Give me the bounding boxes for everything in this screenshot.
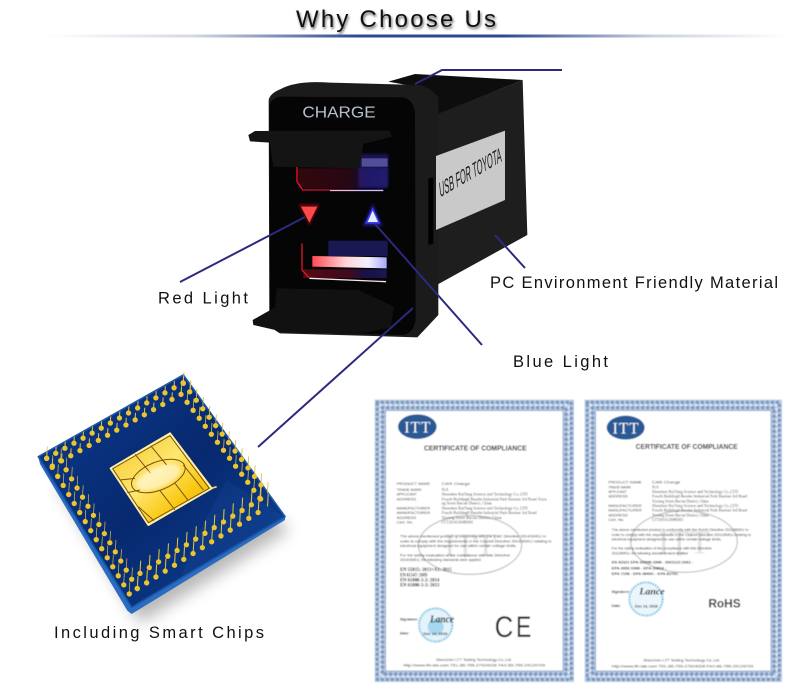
applied standards xyxy=(400,568,452,588)
title underline xyxy=(45,34,785,38)
certificate statement xyxy=(400,534,552,562)
certificate statement: For the safety evaluation of the compliance with this Directive xyxy=(400,553,511,558)
label: Red Light: Red Light xyxy=(158,290,248,308)
pin heads xyxy=(47,383,267,594)
certificate footer xyxy=(612,658,754,669)
certificate statement: 2011/65/EU, the following standards were applied: xyxy=(612,550,688,555)
chip shadow xyxy=(57,477,290,623)
signature stamp: Signature: xyxy=(400,617,418,622)
certificate fields: N/A xyxy=(652,485,659,490)
certificate fields xyxy=(608,480,747,522)
gold SIM contact xyxy=(111,433,217,525)
certificate fields: ADDRESS xyxy=(397,515,416,520)
certificate fields xyxy=(397,481,547,524)
callout: PC material xyxy=(495,235,525,268)
certificate fields: Shenzhen RuiYang Science and Technology Co.,LTD xyxy=(652,489,738,495)
USB FOR TOYOTA label xyxy=(436,131,505,230)
ITT logo: ITT xyxy=(404,419,431,436)
certificate statement: 2014/30/EU, the following standards were applied: xyxy=(400,557,482,562)
certificate fields: Fourth Building6 Baoshe Industrial Park Baotian 3rd Road Xixia xyxy=(442,496,547,501)
applied standards: EPA 7196 - EPA 3640C - EPA 8270C xyxy=(612,571,678,576)
certificate statement: order to comply with the requirements in the Council Directive 2011/65/EU relating to xyxy=(612,532,752,537)
certificate fields: TRADE MARK xyxy=(608,485,631,490)
blue arrow indicator xyxy=(363,203,383,226)
upper USB port xyxy=(297,154,388,191)
certificate footer: http://www.lth-lab.com TEL:86-755-27924028 FAX:86-755-29129709 xyxy=(612,664,754,669)
signature stamp xyxy=(400,608,455,642)
certificate fields: Shenzhen RuiYang Science and Technology Co.,LTD xyxy=(652,503,738,509)
certificate fields: ng Street Bao'an District, China xyxy=(442,501,492,507)
certificate footer: http://www.lth-lab.com TEL:86-755-27924028 FAX:86-755-29129709 xyxy=(403,663,546,668)
signature stamp: Date: xyxy=(612,603,621,608)
title: Why Choose Us xyxy=(296,6,496,33)
side slot xyxy=(428,178,433,245)
label: Blue Light: Blue Light xyxy=(513,353,608,371)
front face xyxy=(269,97,416,335)
certificate fields: N/A xyxy=(442,487,449,492)
lower dust flap xyxy=(253,288,394,333)
board sheen xyxy=(180,480,285,580)
certificate fields: MANUFACTURER xyxy=(397,505,430,510)
certificate statement: The above mentioned product is conformity with the RoHS Directive 2011/65/EU in xyxy=(612,527,748,532)
CE mark xyxy=(495,611,531,644)
lower USB port xyxy=(302,241,388,282)
watermark: ITT xyxy=(658,524,710,561)
certificate fields: ADDRESS xyxy=(397,496,416,501)
certificate heading: CERTIFICATE OF COMPLIANCE xyxy=(636,444,738,451)
certificate footer: Shenzhen LTT Testing Technology Co.,Ltd xyxy=(436,657,511,662)
ITT logo: ITT xyxy=(613,420,639,437)
applied standards: EN 61000-3-3: 2013 xyxy=(400,583,440,588)
certificate fields: Xixiang Street Bao'an District, China xyxy=(652,512,709,518)
certificate fields: MANUFACTURER xyxy=(608,503,642,508)
signature stamp: Lance xyxy=(429,614,455,625)
applied standards: EN 61547: 2009 xyxy=(400,573,428,578)
ITT logo xyxy=(398,414,437,439)
callout lines xyxy=(180,70,562,447)
certificate fields: Xixiang Street Bao'an District, China xyxy=(652,498,709,504)
certificate fields: Cert. No. xyxy=(608,517,624,522)
certificate fields: LTT2014120480301 xyxy=(652,517,684,522)
certificate: RoHS xyxy=(587,402,779,679)
smart chip illustration xyxy=(38,375,290,623)
certificate footer: Shenzhen LTT Testing Technology Co.,Ltd xyxy=(643,658,719,663)
certificate border xyxy=(587,402,779,679)
certificate fields: Cert. No. xyxy=(397,519,413,524)
applied standards: EN 55015: 2013+A1: 2015 xyxy=(400,568,452,573)
certificate fields: PRODUCT NAME xyxy=(397,481,430,486)
chip board xyxy=(38,375,285,607)
signature stamp xyxy=(612,582,665,616)
certificate fields: Fourth Building6 Baoshe Industrial Park Baotian 3rd Road xyxy=(652,494,747,499)
signature stamp: Dec 14, 2016 xyxy=(423,631,448,636)
callout: chips xyxy=(258,308,413,447)
RoHS mark: RoHS xyxy=(708,597,741,611)
certificate fields: LTT2014120480301 xyxy=(442,519,473,524)
label: PC material: PC Environment Friendly Material xyxy=(490,274,778,292)
applied standards: EN 62321 EPA 3050B:1996 - EN/1122:2001 - xyxy=(612,560,694,565)
applied standards: EN 61000-3-2: 2014 xyxy=(400,578,440,583)
certificate statement: electrical equipment designed for use within certain voltage limits. xyxy=(400,543,517,548)
certificate fields: Fourth Building6 Baoshe Industrial Park Baotian 3rd Road xyxy=(652,508,747,513)
certificate fields: CAR Charge xyxy=(652,480,681,485)
certificate fields: PRODUCT NAME xyxy=(608,480,642,485)
certificate fields: Shenzhen RuiYang Science and Technology Co.,LTD xyxy=(442,505,528,511)
body top face xyxy=(388,74,523,115)
certificate fields: Shenzhen RuiYang Science and Technology Co.,LTD xyxy=(442,491,528,497)
red arrow indicator xyxy=(298,204,320,226)
certificate fields: ADDRESS xyxy=(608,512,628,517)
watermark xyxy=(418,516,522,574)
label: Including Smart Chips: Including Smart Chips xyxy=(54,624,264,642)
signature stamp: Dec 14, 2016 xyxy=(635,604,658,609)
certificate fields: CAR Charge xyxy=(442,481,471,486)
certificate statement: For the safety evaluation of the compliance with this Directive xyxy=(612,546,712,551)
product: USB charger module xyxy=(248,74,527,337)
certificate fields: MANUFACTURER xyxy=(608,508,642,513)
watermark xyxy=(631,511,737,572)
certificate: CE xyxy=(377,402,571,679)
ITT logo xyxy=(607,416,645,440)
certificate fields: Fourth Building6 Baoshe Industrial Park Baotian 3rd Road xyxy=(442,510,537,515)
upper dust flap xyxy=(248,131,392,168)
certificate statement: order to comply with the requirements in the Council Directive 2014/30/EU relating to xyxy=(400,538,552,543)
certificate statement xyxy=(612,527,752,555)
certificate statement: electrical equipment designed for use within certain voltage limits. xyxy=(612,537,722,542)
certificate fields: APPLICANT xyxy=(397,491,417,496)
CE mark: E xyxy=(516,611,531,644)
certificate footer xyxy=(403,657,546,668)
CHARGE lettering: CHARGE xyxy=(302,104,376,121)
certificate heading: CERTIFICATE OF COMPLIANCE xyxy=(424,445,527,452)
callout: top xyxy=(415,70,562,84)
certificate fields: APPLICANT xyxy=(608,489,627,494)
signature stamp: Lance xyxy=(638,587,665,597)
applied standards xyxy=(612,560,694,576)
body side face xyxy=(435,80,527,285)
chip edge xyxy=(38,457,285,614)
front rim xyxy=(269,82,438,337)
callout: red light xyxy=(180,217,305,282)
certificate fields: TRADE MARK xyxy=(397,487,422,492)
certificate border xyxy=(377,402,571,679)
signature stamp: Signature: xyxy=(612,589,630,594)
certificate statement: The above mentioned product is conformity with the EMC Directive 2014/30/EU in xyxy=(400,534,546,539)
callout: blue light xyxy=(375,224,482,345)
signature stamp: Date: xyxy=(400,630,409,635)
certificate fields: Xixiang Street Bao'an District, China xyxy=(442,515,502,521)
pins xyxy=(46,377,269,589)
certificate fields: MANUFACTURER xyxy=(397,510,430,515)
watermark: ITT xyxy=(444,528,496,565)
USB FOR TOYOTA label: USB FOR TOYOTA xyxy=(438,143,502,202)
CE mark: C xyxy=(495,611,513,644)
applied standards: EPA 3052:1996 - EPA 3060A - xyxy=(612,566,667,571)
certificate fields: ADDRESS xyxy=(608,494,628,499)
